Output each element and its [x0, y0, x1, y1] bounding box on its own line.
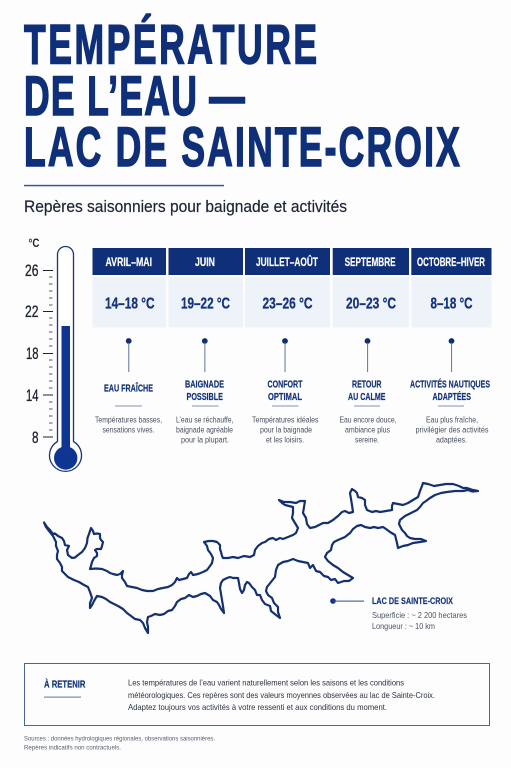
temperature scale: °C [28, 236, 40, 250]
column: juin: BAIGNADE [185, 379, 224, 391]
sources: Repères indicatifs non contractuels. [24, 744, 121, 752]
temperature scale [25, 236, 53, 447]
panel: à retenir: Adaptez toujours vos activités à votre ressenti et aux conditions du moment. [128, 702, 387, 712]
column: juillet-août: et les loisirs. [266, 435, 304, 444]
temperature scale: 14 [26, 386, 38, 405]
column: avril-mai [92, 248, 166, 434]
column: avril-mai: AVRIL–MAI [106, 256, 152, 269]
panel: à retenir: Les températures de l’eau varient naturellement selon les saisons et les conditions [128, 678, 404, 688]
column: juillet-août: Températures idéales [252, 415, 318, 424]
lake callout: Longueur : ~ 10 km [372, 621, 435, 631]
column: octobre-hiver: adaptées. [436, 435, 467, 444]
sources: Sources : données hydrologiques régionales, observations saisonnières. [24, 736, 215, 742]
panel: à retenir: À RETENIR [44, 678, 86, 691]
title: LAC DE SAINTE-CROIX [24, 116, 460, 178]
column: avril-mai: Températures basses, [95, 415, 162, 424]
temperature scale: 22 [25, 302, 38, 321]
lake callout: Superficie : ~ 2 200 hectares [372, 610, 467, 620]
column: juillet-août: pour la baignade [260, 425, 312, 434]
column: juillet-août: JUILLET–AOÛT [256, 256, 318, 269]
column: juin: 19–22 °C [181, 296, 230, 313]
title: DE L’EAU — [24, 65, 245, 127]
column: juin: pour la plupart. [181, 435, 229, 444]
column: octobre-hiver: Eau plus fraîche, [426, 415, 478, 424]
column: septembre [333, 248, 409, 444]
column: avril-mai: sensations vives. [102, 425, 154, 434]
column: juillet-août: CONFORT [268, 379, 303, 391]
lake callout [330, 595, 467, 631]
temperature scale: 18 [26, 344, 38, 363]
panel: à retenir [24, 664, 490, 726]
column: juin [168, 248, 243, 444]
column: octobre-hiver: privilégier des activités [416, 425, 488, 434]
subtitle: Repères saisonniers pour baignade et activités [24, 198, 347, 216]
column: juillet-août: 23–26 °C [262, 296, 313, 313]
column: juin: POSSIBLE [186, 391, 223, 403]
panel: à retenir: météorologiques. Ces repères sont des valeurs moyennes observées au lac de Sainte-Croix. [128, 690, 435, 700]
column: septembre: 20–23 °C [346, 296, 396, 313]
column: septembre: Eau encore douce, [340, 415, 396, 424]
column: juin: JUIN [195, 256, 215, 269]
column: septembre: sereine. [355, 435, 379, 444]
column: septembre: SEPTEMBRE [345, 256, 396, 269]
lake callout: LAC DE SAINTE-CROIX [372, 595, 454, 606]
title [24, 13, 460, 178]
column: avril-mai: EAU FRAÎCHE [104, 382, 153, 395]
column: septembre: AU CALME [348, 391, 386, 403]
column: octobre-hiver: ADAPTÉES [432, 390, 471, 403]
column: avril-mai: 14–18 °C [105, 296, 155, 313]
column: octobre-hiver [410, 248, 492, 444]
column: septembre: RETOUR [352, 379, 382, 391]
column: septembre: ambiance plus [345, 425, 390, 434]
sources [24, 736, 215, 752]
column: juillet-août: OPTIMAL [268, 391, 302, 403]
thermometer [25, 236, 82, 471]
temperature scale: 26 [25, 261, 38, 280]
column: juin: baignade agréable [176, 425, 233, 434]
column: juillet-août [245, 248, 330, 444]
title: TEMPÉRATURE [24, 13, 317, 75]
column: octobre-hiver: 8–18 °C [430, 296, 473, 313]
column: juin: L’eau se réchauffe, [176, 415, 234, 424]
temperature scale: 8 [32, 428, 38, 447]
lake map outline [44, 483, 478, 633]
